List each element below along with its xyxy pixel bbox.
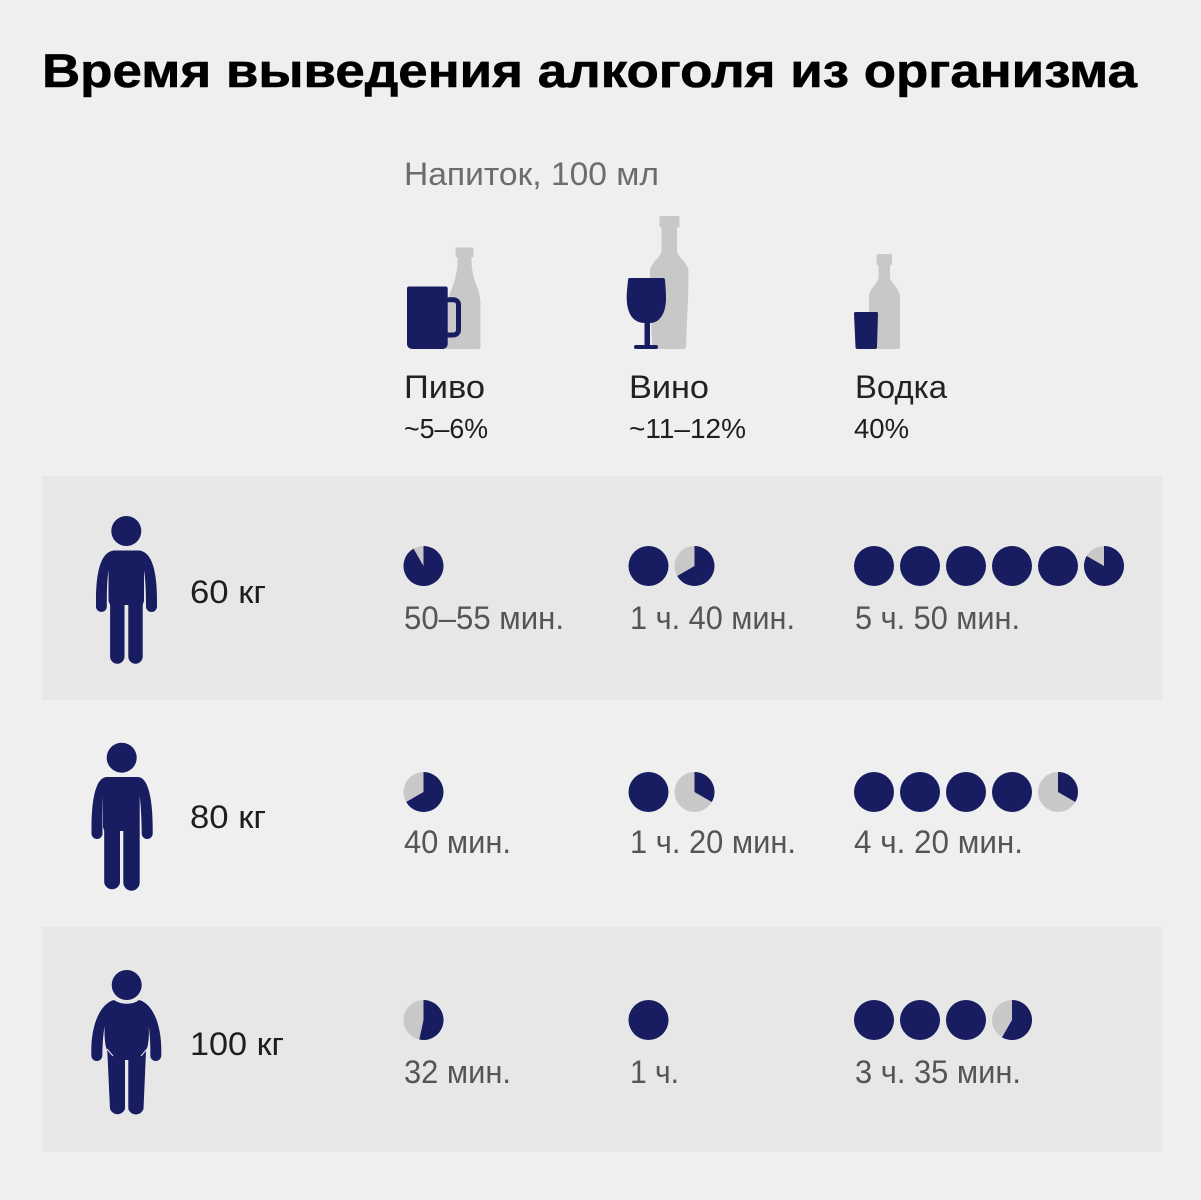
column: beer	[404, 248, 488, 444]
weight label 100 kg: 100 кг	[190, 1026, 284, 1062]
column: wine	[627, 216, 746, 444]
pies: vodka 100 kg	[854, 1000, 1032, 1040]
strength: wine: ~11–12%	[629, 413, 746, 444]
time: beer 100 kg: 32 мин.	[404, 1054, 511, 1090]
weight label 60 kg: 60 кг	[190, 574, 266, 610]
time: vodka 60 kg: 5 ч. 50 мин.	[855, 600, 1020, 636]
weight label 80 kg: 80 кг	[190, 799, 266, 835]
label: wine: Вино	[629, 369, 709, 405]
pies: wine 60 kg	[628, 546, 715, 586]
time: beer 60 kg: 50–55 мин.	[404, 600, 564, 636]
icon: beer bottle and mug	[407, 248, 480, 349]
column group heading: Напиток, 100 мл	[404, 156, 659, 192]
time: wine 100 kg: 1 ч.	[630, 1054, 679, 1090]
panel: row 80 kg	[92, 743, 1078, 891]
icon: vodka bottle and shot glass	[854, 254, 900, 349]
time: wine 80 kg: 1 ч. 20 мин.	[630, 824, 796, 860]
pie: beer 100 kg	[404, 1000, 444, 1040]
icon: person 100 kg	[91, 970, 161, 1115]
pie: beer 80 kg	[404, 772, 444, 812]
time: vodka 100 kg: 3 ч. 35 мин.	[855, 1054, 1021, 1090]
pies: wine 80 kg	[628, 772, 714, 812]
pies: vodka 80 kg	[854, 772, 1078, 812]
panel: row 100 kg	[42, 927, 1162, 1152]
panel: row 60 kg	[42, 476, 1162, 700]
time: beer 80 kg: 40 мин.	[404, 824, 511, 860]
pie: beer 60 kg	[404, 546, 444, 586]
pie: wine 100 kg	[628, 1000, 668, 1040]
icon: wine bottle and glass	[627, 216, 688, 349]
label: vodka: Водка	[855, 369, 947, 405]
label: beer: Пиво	[404, 369, 485, 405]
time: vodka 80 kg: 4 ч. 20 мин.	[854, 824, 1023, 860]
column: vodka	[854, 254, 947, 444]
time: wine 60 kg: 1 ч. 40 мин.	[630, 600, 795, 636]
icon: person 60 kg	[96, 516, 157, 664]
icon: person 80 kg	[92, 743, 153, 891]
title: Время выведения алкоголя из организма	[42, 44, 1138, 97]
pies: vodka 60 kg	[854, 546, 1124, 586]
strength: vodka: 40%	[854, 413, 909, 444]
strength: beer: ~5–6%	[404, 413, 488, 444]
